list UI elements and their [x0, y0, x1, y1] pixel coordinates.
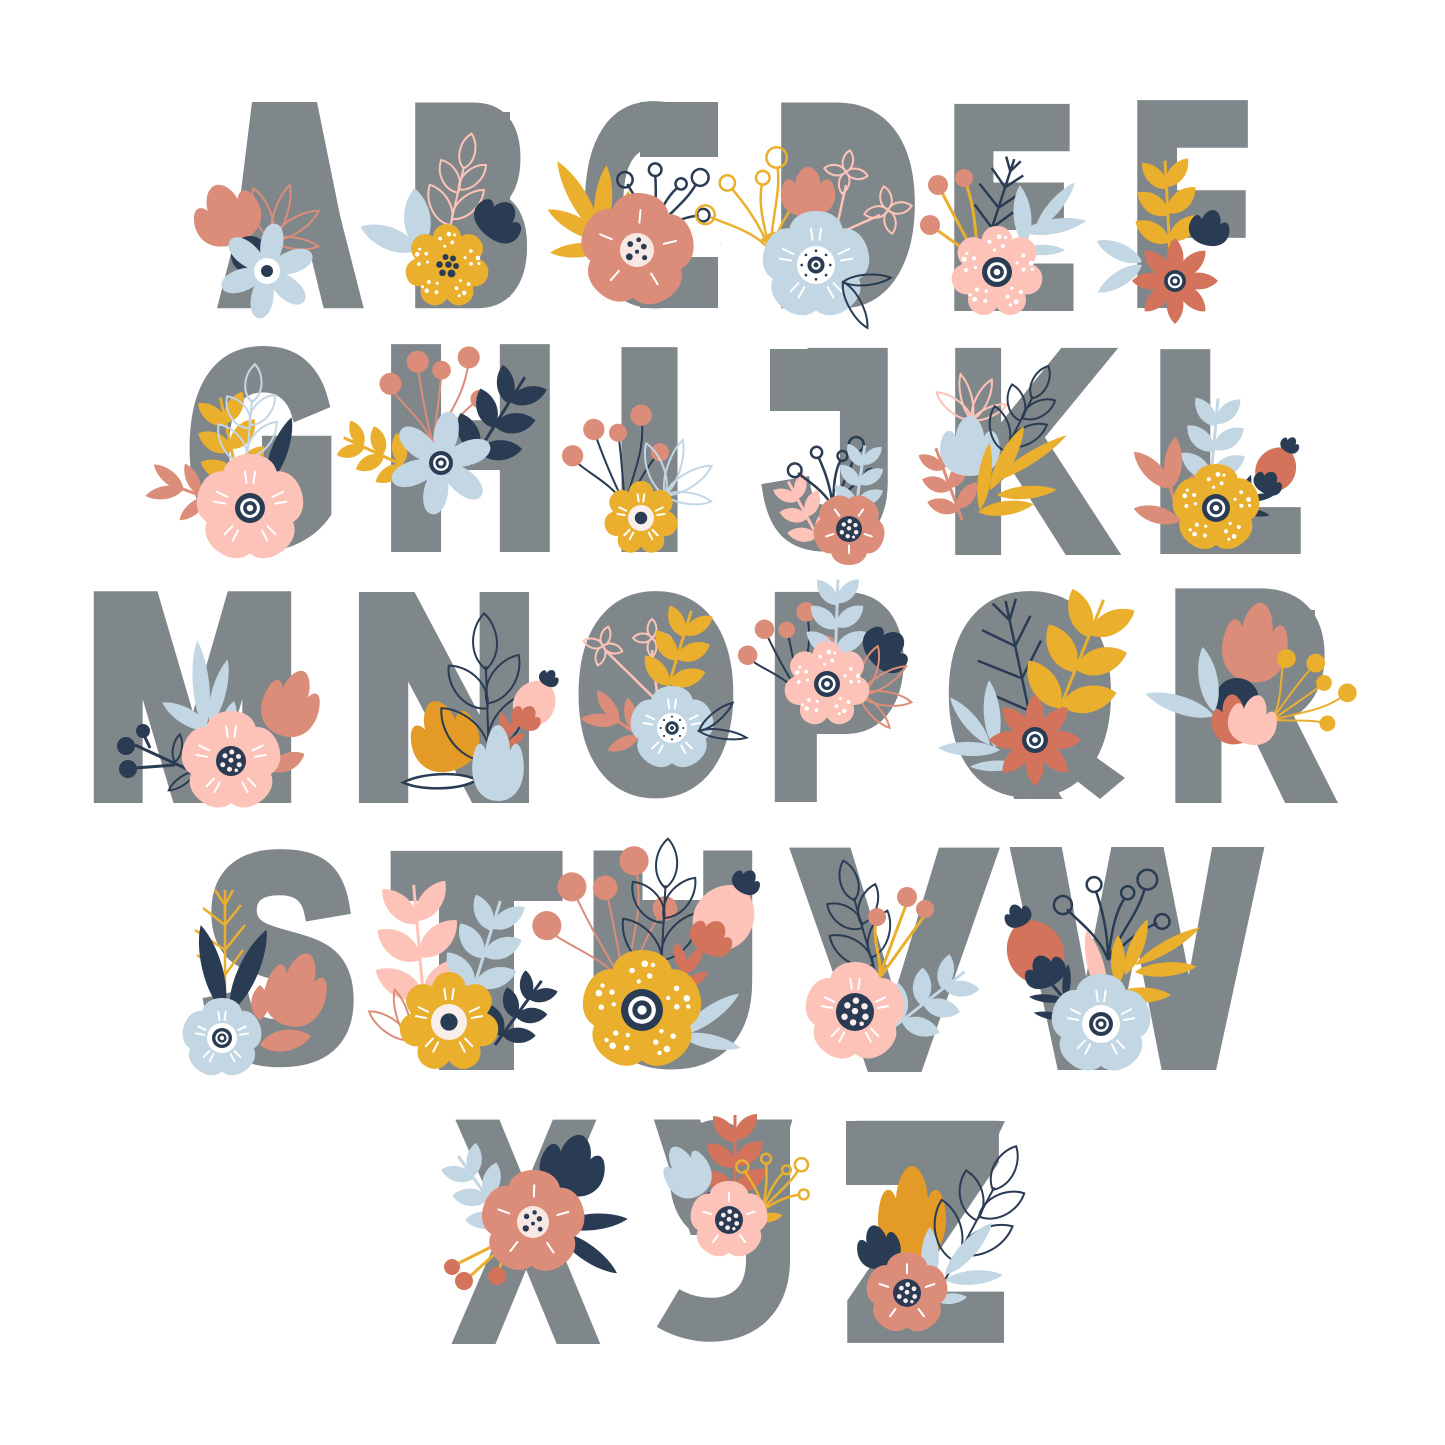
letter F: F [1130, 48, 1249, 359]
letter Y [654, 1120, 792, 1342]
letter P: P [767, 540, 905, 854]
letter W: W [1019, 792, 1257, 1125]
letter S: S [204, 800, 356, 1117]
flower [782, 641, 872, 729]
letter T: T [396, 797, 557, 1124]
bouquet on X [425, 1127, 628, 1290]
flower [1046, 974, 1156, 1079]
bouquet on Q [938, 571, 1157, 786]
flower [800, 962, 910, 1067]
letter V: V [799, 792, 991, 1128]
bouquet on J [760, 435, 902, 585]
letter U: U [586, 798, 760, 1120]
flower [576, 950, 708, 1076]
flower [396, 972, 502, 1075]
bouquet on M [117, 640, 330, 816]
letter B: B [409, 52, 530, 359]
flower [862, 1252, 952, 1338]
flower [382, 403, 500, 523]
bouquet on B [356, 126, 532, 310]
letter O: O [576, 543, 736, 845]
bouquet on U [518, 836, 778, 1076]
flower [190, 454, 310, 568]
letter Z: Z [847, 1065, 1004, 1397]
flower [686, 1181, 772, 1263]
bouquet on Y [652, 1109, 818, 1263]
bouquet on V [800, 851, 993, 1067]
bouquet on L [1114, 389, 1311, 557]
bouquet on E [920, 151, 1087, 320]
letter H: H [382, 292, 559, 603]
bouquet on A [183, 173, 328, 326]
flower [403, 224, 491, 310]
bouquet on H [326, 346, 564, 523]
flower [178, 998, 266, 1082]
bouquet on D [683, 139, 916, 331]
bouquet on O [569, 595, 747, 774]
bouquet on I [555, 401, 721, 557]
flower [1132, 238, 1218, 324]
bouquet on F [1093, 152, 1234, 324]
bouquet on Z [852, 1122, 1055, 1338]
flower [626, 686, 718, 774]
letter K: K [947, 298, 1109, 606]
bouquet on W [987, 870, 1203, 1079]
flower [212, 216, 322, 326]
letter Y: y [662, 1025, 784, 1332]
bouquet on G [136, 361, 310, 568]
letter E: E [947, 52, 1075, 362]
letter I: I [611, 297, 688, 603]
letter G: G [187, 300, 338, 598]
bouquet on R [1143, 598, 1366, 755]
bouquet on T [359, 872, 570, 1075]
letter J: J [766, 297, 897, 599]
flower [793, 476, 902, 585]
flower [569, 188, 705, 318]
bouquet on K [905, 349, 1077, 531]
flower [949, 226, 1045, 320]
bouquet on N [400, 612, 571, 801]
bouquet on P [728, 573, 931, 732]
letter N: N [349, 539, 539, 855]
bouquet on S [178, 890, 337, 1082]
flower [602, 481, 680, 557]
bouquet on C [544, 149, 721, 318]
letter L: L [1151, 299, 1301, 605]
letter X: X [461, 1064, 591, 1399]
letter A: A [220, 53, 361, 359]
letter Q: Q [946, 543, 1114, 845]
flower [756, 211, 876, 325]
letter R: R [1167, 534, 1330, 856]
letter M: M [84, 538, 301, 855]
letter Q [948, 591, 1125, 799]
letter D: D [774, 51, 917, 358]
letter C: C [583, 55, 718, 356]
flower [176, 711, 286, 816]
flower [1167, 464, 1265, 557]
flower [989, 694, 1081, 786]
flower [473, 1168, 592, 1281]
